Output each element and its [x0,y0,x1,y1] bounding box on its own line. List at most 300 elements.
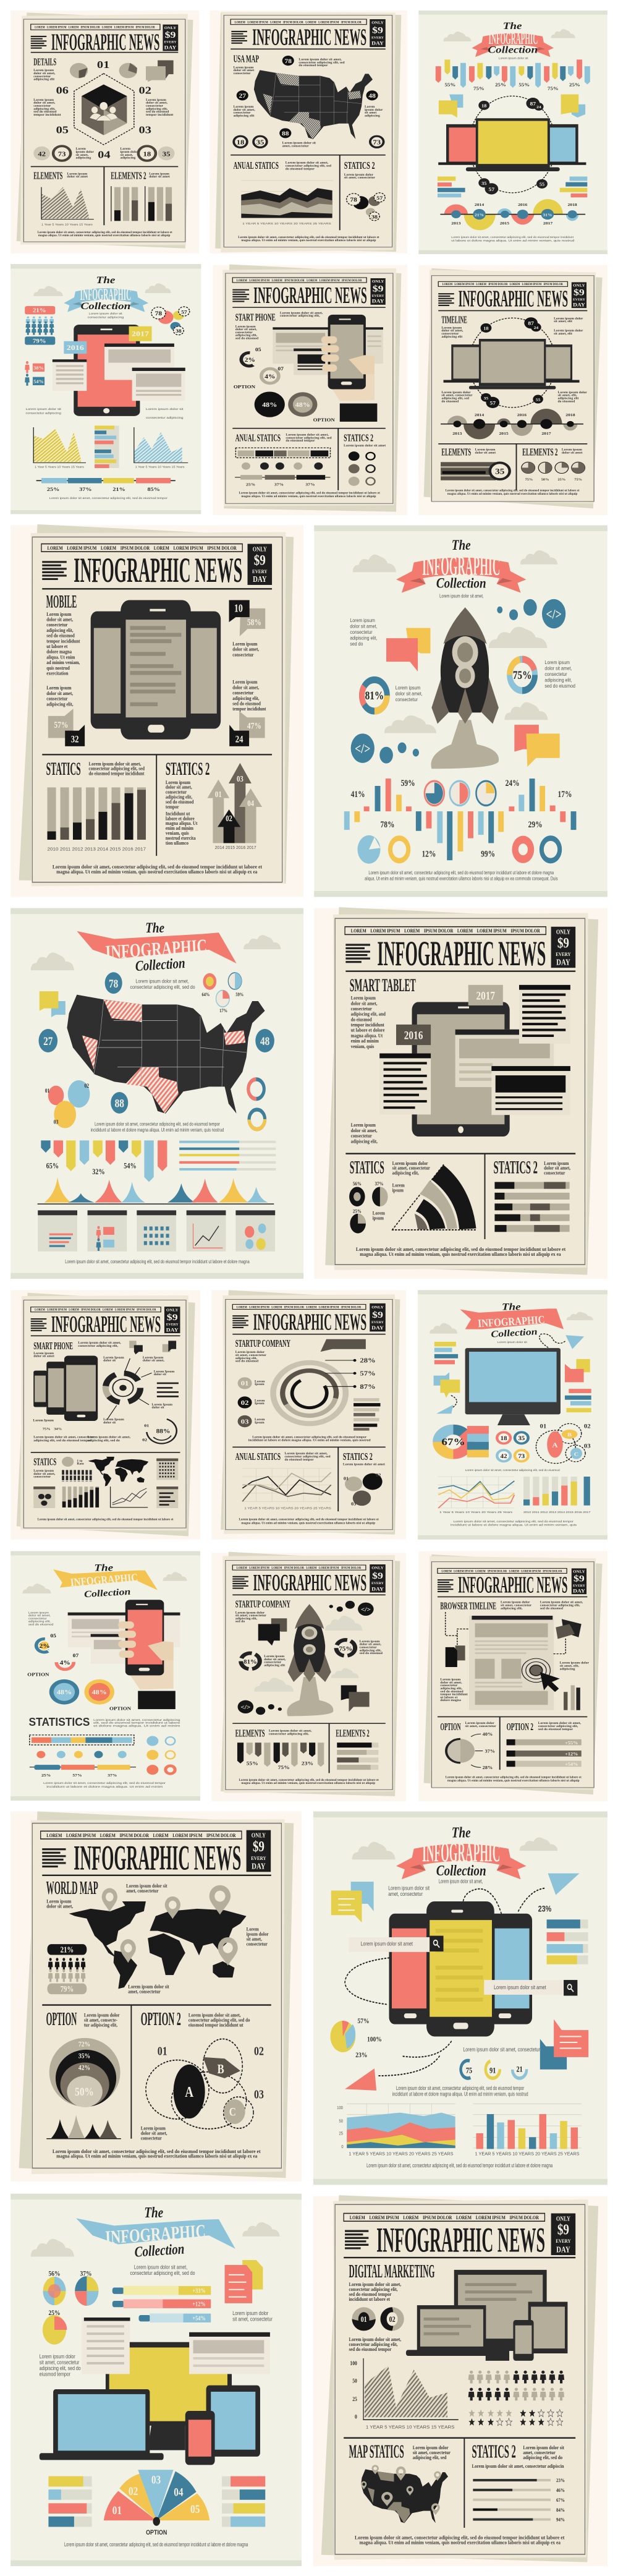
section: statics: 25% [353,1208,362,1214]
panel: newspaper mobile [11,524,303,897]
section: map statics: adipiscing elit, sed [413,2454,447,2460]
ring stats: 07 [277,366,284,372]
ring stat: 02 [142,1438,147,1443]
text blocks: sit amet, elit, [557,394,577,398]
callouts: 10 [234,603,243,615]
text blocks: Lorem ipsum [33,1352,54,1355]
footer text: magna aliqua. Ut enim ad minim veniam, quis nostrud exercitation ullamco laboris nisi ut aliquip [241,1522,375,1525]
text blocks: sed do eiusmod [360,1652,383,1655]
code badges and dots [351,599,565,764]
text blocks: consectetur [351,1005,372,1012]
title ribbon: Lorem ipsum dolor sit [497,1341,527,1344]
timeline: 2017 [541,431,551,436]
section: statics: sit amet, consectetur [392,1165,430,1171]
timeline: 2013 [452,431,462,436]
title ribbon: INFOGRAPHIC [105,2220,206,2248]
text columns: consectetur [146,104,164,108]
text blocks: adipiscing elit, sed [441,397,469,400]
text blocks: consectetur [440,1684,458,1687]
bar chart band: 12% [421,848,436,859]
text blocks: Lorem ipsum dolor sit [126,1883,167,1889]
title ribbon: Lorem ipsum dolor sit amet, [439,593,484,599]
text blocks: Lorem ipsum dolor [560,1661,589,1665]
section: statics 2 [344,160,385,221]
pie charts: 25% [48,2309,61,2317]
masthead: LOREM LOREM IPSUM LOREM IPSUM DOLOR LOREM LOREM IPSUM IPSUM DOLOR [234,21,362,24]
star ratings [468,2410,563,2426]
text blocks: sed do eiusmod [235,337,258,340]
text columns: adipiscing elit, [146,108,168,111]
footer text: Lorem ipsum dolor sit amet, consectetur adipiscing elit, sed do eiusmod tempor incididunt ut labore et [446,1776,582,1779]
text blocks: dolor sit [154,1373,166,1376]
section: option: Lorem ipsum dolor [465,1722,494,1725]
venn diagram: A [552,1441,558,1449]
numbered badges: 01 [361,2316,367,2324]
section: statics 2: enim ad minim [166,825,193,831]
section: statics 2: STATICS 2 [166,758,210,778]
panel: newspaper smart phone: SMART PHONE [33,1340,73,1352]
text blocks: eiusmod tempor [40,2371,70,2378]
masthead: LOREM LOREM IPSUM LOREM IPSUM DOLOR LOREM LOREM IPSUM IPSUM DOLOR [237,1566,361,1570]
title ribbon [33,274,171,319]
section: option 2: +12% [565,1752,578,1757]
code badges and dots: </> [361,1607,371,1613]
section: statics: dolor sit amet, [33,1472,56,1476]
title ribbon: Collection [81,300,130,311]
orbit nodes: 24 [534,325,539,330]
panel: newspaper timeline: TIMELINE [441,314,467,326]
hexagon diagram: 03 [139,124,151,136]
phone percentages: Lorem Ipsum [33,1419,54,1422]
phones [33,1355,98,1421]
panel: collection usa map [11,908,303,1279]
phone percentages [33,1419,62,1431]
text blocks [349,2281,401,2352]
rocket [287,1604,333,1716]
footer text [239,492,380,498]
masthead: ONLY [573,284,585,288]
section: annual statics: 37% [305,482,315,487]
masthead: DAY [371,1586,384,1592]
orbit nodes: 55 [540,182,544,187]
text block: sit amet, consectetur [235,1354,267,1357]
text blocks: dolor sit amet, [232,646,259,652]
text columns: tempor incididunt [146,113,174,117]
text blocks: sit amet, elit [554,332,572,336]
panel: newspaper details: INFOGRAPHIC NEWS [51,29,159,55]
text blocks [46,1883,269,1995]
hexagon diagram: 04 [98,149,111,161]
text blocks: consectetur adipiscing elit, [349,2341,397,2347]
section: statics 2: Lorem ipsum dolor sit [523,2444,564,2450]
clouds [384,627,548,733]
footer text: Lorem ipsum dolor sit amet, consectetur adipiscing elit, sed do eiusmod tempor incididunt ut labore et dolore magna [368,869,554,876]
venn diagram [536,1423,591,1464]
numbered circles: 01 [241,1380,249,1387]
masthead: $9 [372,1309,383,1320]
section: elements 2: 50% [541,478,549,482]
text blocks [235,312,323,340]
hatched area chart: 25 [352,2395,357,2402]
pie chart: 57% [357,2017,370,2025]
section: annual statics: do eiusmod tempor [284,1458,314,1462]
section: elements: Lorem ipsum dolor sit amet, [269,1729,311,1733]
section: annual statics [235,1451,331,1510]
section: elements: 75% [278,1765,290,1770]
text blocks: sed do [350,641,363,647]
masthead: LOREM LOREM IPSUM LOREM IPSUM DOLOR LOREM LOREM IPSUM IPSUM DOLOR [48,545,237,551]
panel: newspaper start phone: INFOGRAPHIC NEWS [253,283,367,309]
section: statics 2: dolor sit amet, [544,1165,570,1171]
text blocks: dolor sit amet, [46,690,73,696]
masthead: EVERY [556,2238,571,2244]
text blocks: adipiscing elit, and [351,1011,386,1017]
circle stats: ipsum dolor [121,150,139,154]
arrow bars: 25% [569,82,580,87]
line bars [179,1142,276,1169]
fan chart: 03 [151,2473,161,2486]
segmented bar: 37% [108,1773,117,1778]
panel: collection monitor [418,1290,607,1540]
ring stats [234,347,335,422]
section: option: sit amet, consecte- [84,2017,117,2023]
section: elements [441,446,510,480]
paper plane and dotted path [345,1874,580,2076]
year tags: 2016 [67,343,84,352]
title ribbon: INFOGRAPHIC [422,1836,500,1867]
section: elements 2 [336,1728,378,1770]
orbit nodes: 87 [528,320,535,326]
section: elements 2: 25% [558,478,565,482]
section: statics 2 [472,2441,565,2523]
section: statics 2: STATICS 2 [343,1451,373,1463]
laptop [40,2389,164,2460]
text blocks: Lorem Ipsum [143,1356,163,1360]
section: statics: 56% [353,1180,362,1187]
footer text: Lorem ipsum dolor sit amet, consectetur adipiscing elit, sed do eiusmod tempor incididunt ut labore et [355,2535,565,2541]
panel: newspaper smart tablet [314,907,607,1279]
text blocks: adipiscing elit [441,335,463,339]
pie charts [70,63,137,78]
info cards [38,1210,275,1252]
text block: exercitation [46,670,69,676]
arrow bars: 75% [548,86,559,92]
text blocks: sit amet, elit [554,320,572,323]
masthead: $9 [253,1838,265,1854]
color bars [438,177,587,197]
numbered circles: Ipsum [255,1383,265,1386]
title ribbon: Collection [134,2240,185,2260]
panel: newspaper mobile: MOBILE [46,591,77,612]
code badges and dots [238,1601,374,1715]
numbered circles: Lorem [255,1418,265,1422]
speech bubbles [386,628,560,767]
mini pies [202,973,243,1013]
text blocks: dolor sit [152,1406,164,1409]
text blocks: ut labore et dolore [351,1027,385,1033]
laptops [438,118,586,171]
masthead: DAY [371,1325,384,1331]
text blocks: consectetur [234,111,251,115]
section: statics: consectetur adipiscing elit, sed [89,766,145,772]
text block: consectetur adipiscing elit, sed do [130,984,195,990]
text blocks: adipiscing elit, sed do [40,2365,81,2371]
timeline [440,199,585,230]
circle stats: 35 [163,150,171,158]
fan chart: OPTION [146,2529,167,2536]
year tags: 2017 [476,989,495,1002]
text block: incididunt ut labore et dolore magna aliqua. Ut enim ad minim veniam, quis nostrud [392,2091,528,2097]
text blocks: dolor sit amet [234,69,255,72]
bar chart [523,1477,590,1514]
section: elements 2: dolor sit amet [562,451,583,454]
text blocks: consectetur adipiscing elit, [280,314,320,318]
section: option [440,1721,496,1770]
panel: newspaper start phone [213,264,407,515]
year tags: 2017 [132,330,150,338]
donut stats: 81% [365,689,384,702]
section: statics: 2010 2011 2012 2013 2014 2015 2016 2017 [48,847,146,852]
masthead [41,1830,271,1878]
text block: Lorem ipsum dolor sit amet, consectetur adipiscing [93,1718,180,1722]
text blocks: adipiscing elit, [46,701,73,707]
text blocks: Lorem ipsum dolor sit amet, consectetur [33,1436,95,1439]
text blocks: Lorem ipsum dolor [557,391,587,395]
section: statics: Lorem [373,1210,385,1216]
venn diagram: C [574,1452,578,1457]
pie charts: 56% [48,2270,61,2278]
masthead: LOREM LOREM IPSUM LOREM IPSUM DOLOR LOREM LOREM IPSUM IPSUM DOLOR [442,283,563,286]
panel: collection tablet [11,264,201,514]
section: statics: STATICS [46,758,81,778]
panel: collection devices [11,2194,302,2566]
text columns [33,98,174,117]
section: statics 2: amet, consectetur [523,2449,556,2455]
ring stat: 88% [156,1428,171,1435]
text block: adipiscing elit, [235,1357,258,1360]
clouds [254,1616,363,1692]
section: map statics: Lorem ipsum dolor [413,2444,449,2450]
ring stats: 2% [245,357,255,364]
text columns: adipiscing elit, [33,108,56,111]
text blocks: Lorem ipsum [234,66,253,69]
title ribbon: Lorem ipsum dolor sit amet, [439,1879,483,1885]
orbit nodes: 57 [489,400,496,406]
text blocks: consectetur adipiscing elit, [78,1344,119,1348]
text blocks: Lorem ipsum dolor sit amet, [349,2336,401,2342]
section: annual statics: ANUAL STATICS [234,160,279,172]
map markers: 88 [115,1097,124,1110]
masthead: LOREM LOREM IPSUM LOREM IPSUM DOLOR LOREM LOREM IPSUM IPSUM DOLOR [35,1308,156,1311]
text block: Lorem ipsum dolor sit amet, consectetur [463,2047,540,2053]
text blocks: sed do eiusmod [544,683,575,689]
text blocks: adipiscing elit, [350,635,377,641]
section: statics 2: STATICS 2 [494,1157,538,1177]
circle stats: sit amet, [75,153,89,157]
section: statics 2: adipiscing elit, sed do [523,2454,562,2460]
text blocks: sed do eiusmod [540,1607,563,1610]
masthead [232,1564,386,1596]
section: statics [33,1456,178,1508]
text blocks: Lorem ipsum [232,641,257,647]
section: statics 2: 46% [556,2487,565,2493]
footer text: incididunt ut labore et dolore magna aliqua. Ut enim ad minim [46,1785,163,1789]
masthead: EVERY [573,1584,585,1588]
mini pies: 59% [235,992,243,997]
section: option: 40% [483,1732,493,1737]
text block: Lorem ipsum dolor sit amet, [135,978,189,984]
bubble stats: 38 [176,328,182,334]
text block: amet, consectetur [388,1891,423,1897]
timeline: 2018 [565,412,575,417]
phones [389,1901,532,2036]
section: statics 2: 94% [556,2517,565,2523]
title ribbon: The [96,274,116,286]
masthead: EVERY [164,41,177,44]
text blocks: adipiscing elit [557,397,579,400]
monitor [465,1348,561,1425]
circle stats: 18 [143,150,151,158]
text blocks: Lorem ipsum dolor sit amet, [298,58,342,61]
speech bubbles [439,95,585,117]
panel: newspaper details [11,11,199,254]
callouts: 24 [235,734,243,745]
section: statics 2: sed do eiusmod [166,799,194,805]
footer text: Lorem ipsum dolor sit amet, consectetur adipiscing elit, sed do eiusmod tempor incididunt ut labore et dolore magna [64,2542,248,2548]
text blocks: Lorem ipsum [46,685,71,691]
callouts: 58% [247,617,261,627]
progress bars [112,2286,211,2322]
section: statics 2: veniam, quis [166,830,189,836]
section: statics: consectetur [33,1475,51,1478]
masthead [231,19,386,50]
callouts: 47% [247,720,261,731]
text blocks: adipiscing [365,114,380,117]
masthead: ONLY [253,547,267,553]
hexagon diagram: 05 [56,124,69,136]
people stat [48,1944,87,1994]
section: statics 2: Lorem ipsum dolor sit amet [343,1463,385,1466]
footer text [451,1520,577,1527]
dotted orbit [469,96,556,193]
footer text: aliqua. Ut enim ad minim veniam, quis nostrud exercitation ullamco laboris nisi ut aliquip ex ea commodo consequat. Duis [365,876,558,882]
section: statics [349,1157,477,1234]
document icons [225,2260,263,2303]
text blocks: Lorem [365,105,375,109]
title ribbon: Lorem ipsum dolor sit [499,57,528,60]
masthead: EVERY [573,298,585,302]
section: elements: consectetur adipiscing elit, [269,1733,309,1736]
footer text [43,1782,166,1789]
text blocks: Lorem ipsum [351,995,376,1001]
ring stats: 48% [57,1689,72,1696]
segmented bar [30,1735,136,1778]
text blocks: adipiscing [560,1668,575,1671]
text blocks: Lorem ipsum [440,1678,460,1681]
masthead: LOREM LOREM IPSUM LOREM IPSUM DOLOR LOREM LOREM IPSUM IPSUM DOLOR [350,2214,539,2220]
text blocks: Lorem ipsum [234,105,253,109]
text block [91,1121,224,1133]
section: statics 2: adipiscing elit, [166,794,192,800]
text blocks [441,317,588,403]
arrow bars: 54% [124,1162,137,1171]
text blocks: do eiusmod [351,1017,372,1023]
text block: dolor sit amet, [33,72,56,75]
masthead [438,281,587,312]
text block: Lorem ipsum dolor sit amet, consectetur adipiscing elit, sed do eiusmod tempor [252,1436,367,1439]
text blocks [33,1342,175,1443]
section: statics 2: 03 [237,774,243,783]
section: option: tur adipiscing elit, [84,2022,117,2028]
masthead: $9 [574,287,585,297]
title ribbon: INFOGRAPHIC [70,1572,138,1589]
area chart: 1 YEAR 5 YEARS 10 YEARS 20 YEARS 25 YEARS [349,2152,454,2157]
section: option 2: 01 [158,2044,167,2058]
panel: newspaper details: DETAILS [33,56,56,68]
text blocks: dolor sit amet [33,1355,54,1358]
progress bars: +54% [192,2316,206,2322]
text blocks: consectetur [264,1661,282,1664]
orbit nodes: 24 [536,105,541,109]
section: annual statics [235,432,332,487]
text block: adipiscing elit, [46,627,73,633]
text blocks: consectetur [544,671,567,677]
masthead: ONLY [252,1833,266,1840]
text blocks [350,617,575,702]
segmented bar: 25% [41,1773,51,1778]
venn diagram: 01 [540,1423,546,1430]
masthead [345,927,575,973]
section: elements 2: dolor sit amet [149,175,170,179]
numbered badges [352,2307,404,2331]
numbered circles: 03 [241,1418,249,1425]
section: elements: Lorem ipsum [67,173,87,176]
browser windows [379,985,570,1115]
text blocks: dolore magna [440,1699,461,1702]
donut chart [439,1430,468,1454]
panel: newspaper smart phone: INFOGRAPHIC NEWS [51,1311,161,1337]
text block: tempor incididunt [46,638,80,644]
fan chart: 01 [112,2504,122,2517]
text blocks [234,58,383,148]
text blocks: consectetur [46,696,68,702]
concentric ring chart [273,1357,376,1424]
text block: ut labore et [46,643,68,649]
panel: newspaper startup rocket: STARTUP COMPANY [235,1598,290,1610]
text block [248,1436,371,1443]
map markers [39,972,274,1114]
text blocks: ipsum dolor [247,1931,269,1937]
people stat [25,306,55,345]
text block: quis nostrud [46,665,70,671]
text blocks: dolor sit amet, [351,1127,378,1133]
heading: world map: WORLD MAP [46,1878,98,1898]
text blocks: Lorem ipsum dolor sit amet, [78,1342,121,1345]
text blocks: tempor incididunt [351,1021,384,1028]
bar chart: 2010 2011 2012 2013 2014 2015 2016 2017 [523,1511,590,1514]
circle stats: 42 [38,150,46,158]
donut stats: 81% [243,1659,257,1665]
map markers: 88 [282,131,289,137]
section: annual statics: Lorem ipsum dolor sit amet, [286,433,329,437]
ring stats: OPTION [313,417,335,422]
text blocks [440,1601,590,1702]
map pins [102,1885,238,1966]
text columns: consectetur [33,104,51,108]
people stat: 21% [33,308,46,314]
title ribbon: The [452,537,471,553]
bar chart band: 17% [557,789,572,799]
